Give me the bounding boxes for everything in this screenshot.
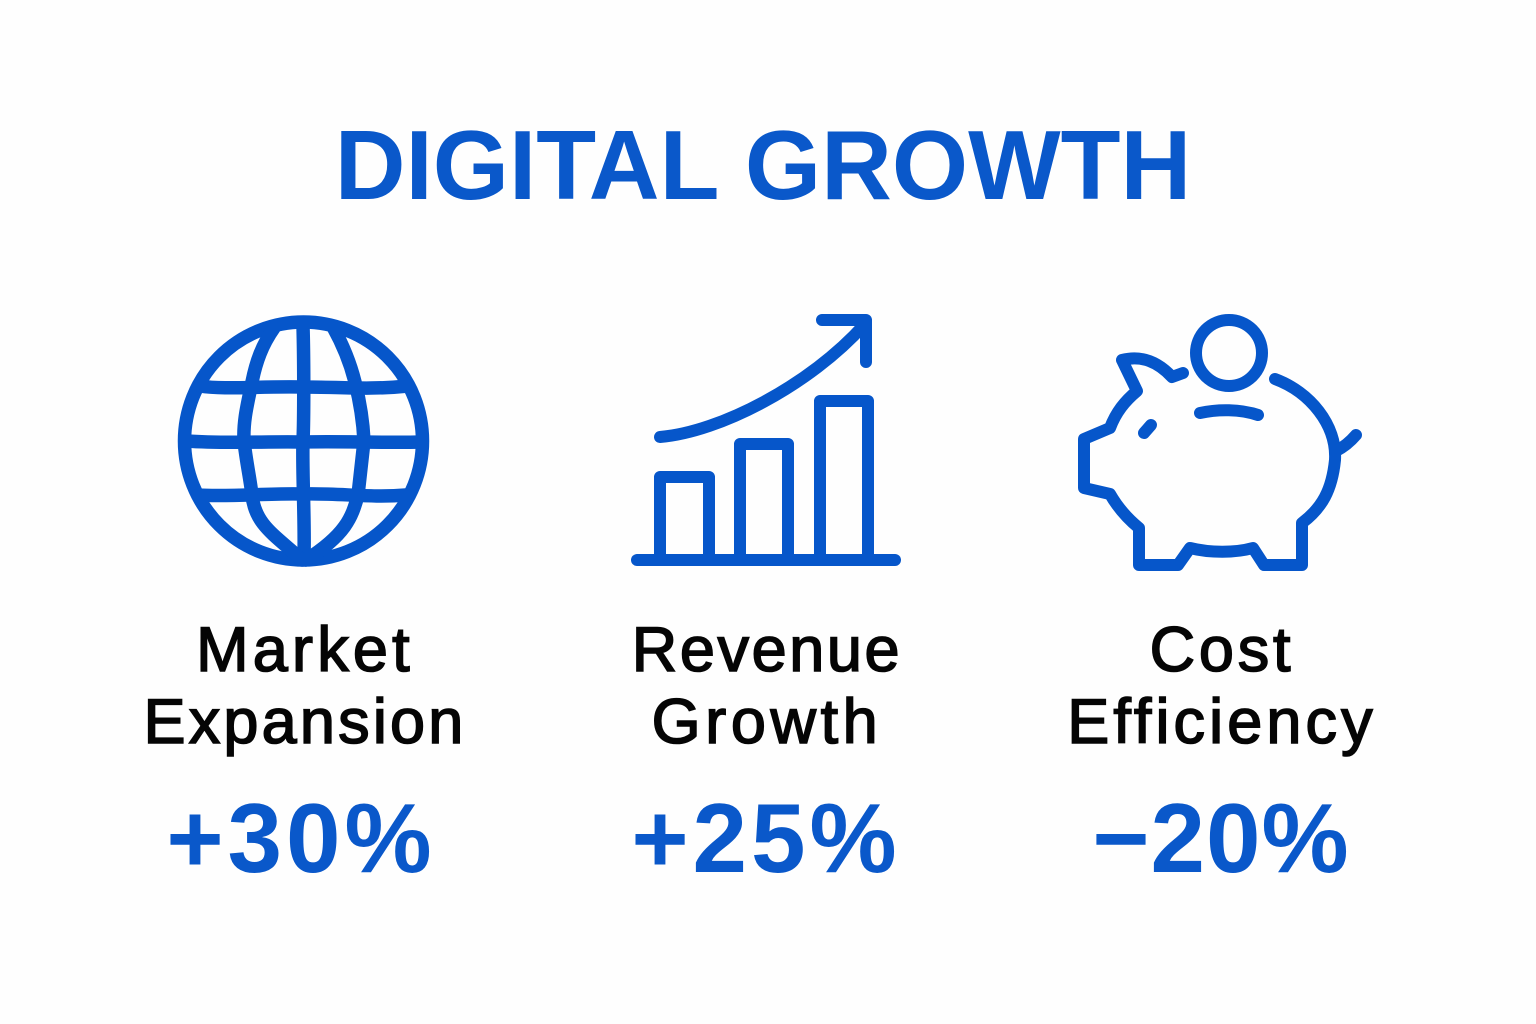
value: market expansion: +30% bbox=[166, 783, 436, 893]
icon: piggy bank with coin bbox=[1084, 320, 1356, 565]
label: cost efficiency: Cost bbox=[1150, 615, 1294, 685]
label: market expansion bbox=[143, 615, 467, 757]
label: cost efficiency bbox=[1067, 615, 1377, 757]
label: revenue growth: Revenue bbox=[632, 615, 902, 685]
title: DIGITAL GROWTH bbox=[335, 110, 1191, 220]
icon: globe bbox=[184, 322, 422, 560]
label: market expansion: Market bbox=[196, 615, 414, 685]
value: cost efficiency: −20% bbox=[1092, 783, 1350, 893]
label: revenue growth: Growth bbox=[652, 687, 882, 757]
label: revenue growth bbox=[632, 615, 902, 757]
label: cost efficiency: Efficiency bbox=[1067, 687, 1377, 757]
label: market expansion: Expansion bbox=[143, 687, 467, 757]
icon: rising bar chart with arrow bbox=[637, 320, 895, 560]
value: revenue growth: +25% bbox=[631, 783, 901, 893]
